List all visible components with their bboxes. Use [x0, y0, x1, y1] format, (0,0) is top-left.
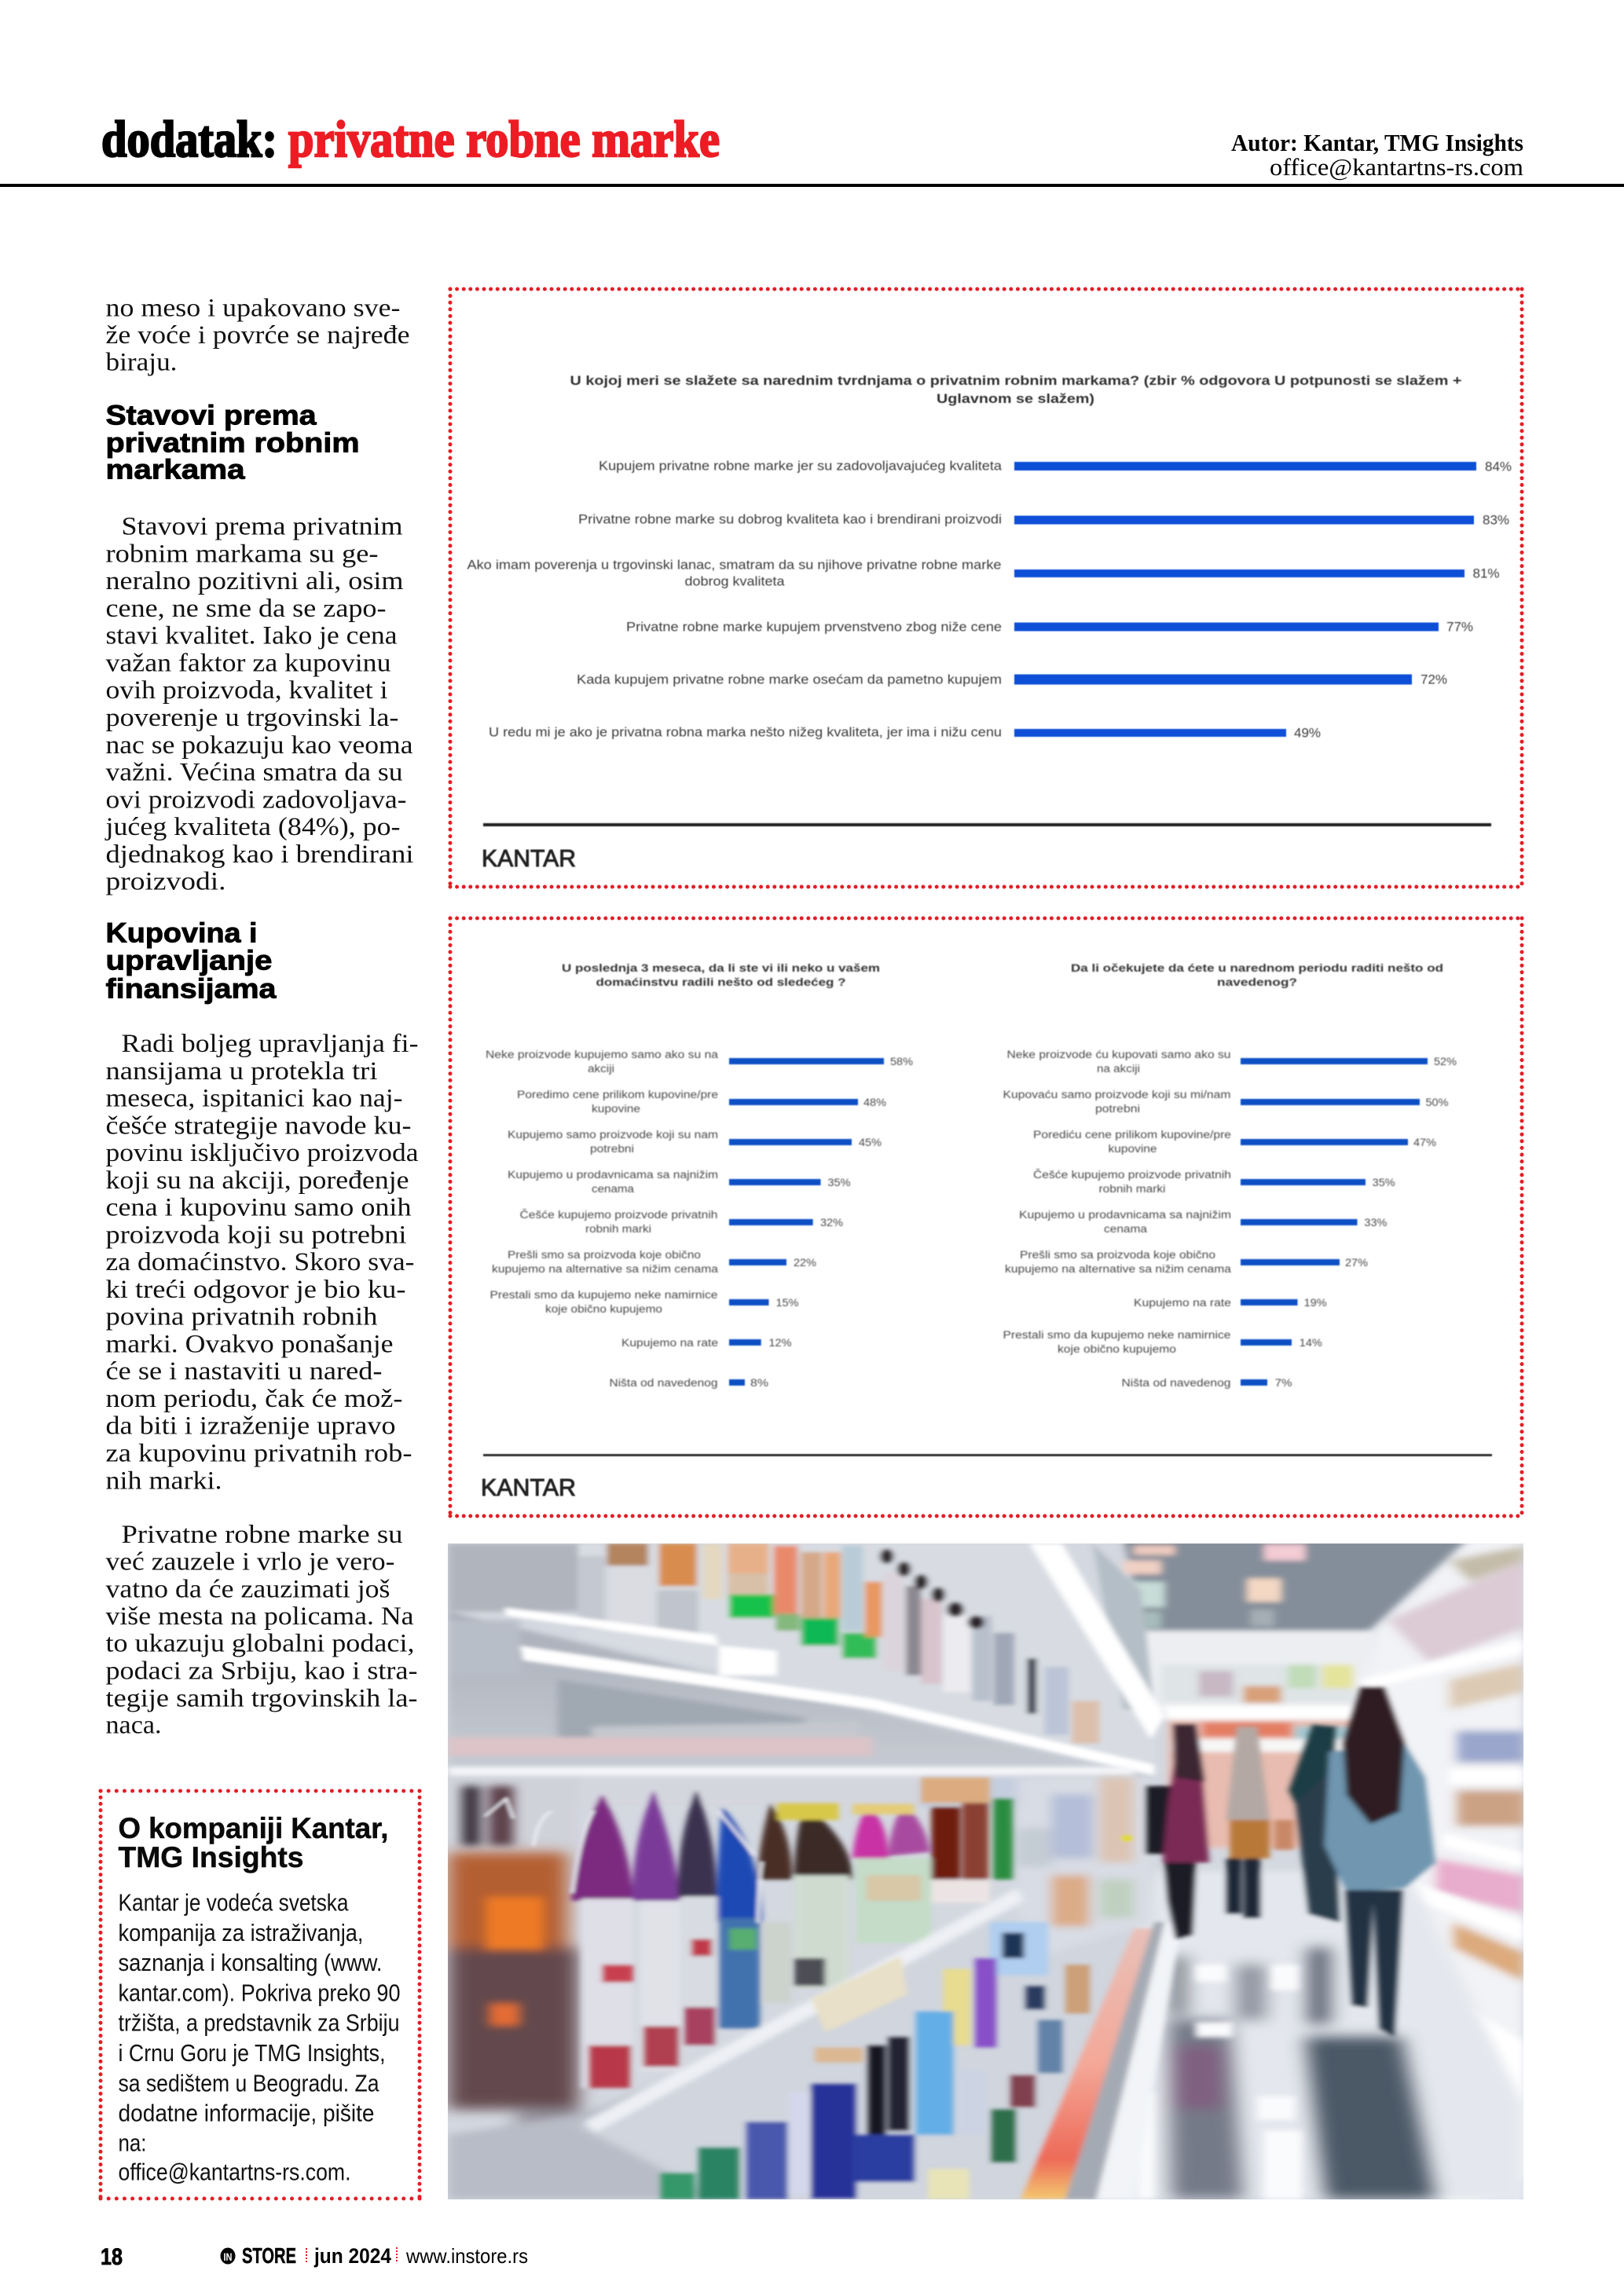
- values: 49%: [1294, 726, 1321, 740]
- chart: agreement statements: [467, 373, 1512, 872]
- paragraph: finance management: povina privatnih robnih: [105, 1303, 378, 1331]
- labels: Kupujemo u prodavnicama sa najnižim: [508, 1169, 718, 1181]
- labels: potrebni: [590, 1143, 634, 1155]
- sidebar body: Kantar je vodeća svetska: [118, 1888, 349, 1917]
- labels: Ništa od navedenog: [610, 1377, 718, 1389]
- chart title: [1071, 961, 1443, 988]
- author credit: [1231, 129, 1523, 181]
- labels: koje obično kupujemo: [545, 1303, 662, 1315]
- labels: potrebni: [1095, 1103, 1140, 1115]
- panel: behaviour charts: [450, 918, 1522, 1516]
- paragraph: continuation: biraju.: [105, 349, 178, 377]
- paragraph: finance management: nih marki.: [105, 1467, 222, 1496]
- heading: Stavovi prema privatnim robnim markama: [105, 401, 360, 485]
- author credit: Autor: Kantar, TMG Insights: [1231, 129, 1523, 156]
- yellow price spot: [1120, 1834, 1133, 1842]
- page number: 18: [101, 2244, 123, 2270]
- sidebar border: dotted: [101, 1791, 420, 2199]
- paragraph: attitudes: neralno pozitivni ali, osim: [105, 567, 404, 595]
- Kantar logo: KANTAR: [481, 1474, 576, 1501]
- labels: akciji: [588, 1063, 614, 1075]
- paragraph: attitudes: nac se pokazuju kao veoma: [105, 731, 413, 760]
- paragraph: continuation: no meso i upakovano sve-: [105, 294, 401, 322]
- statement labels: [467, 459, 1003, 740]
- labels: Prešli smo sa proizvoda koje obično: [508, 1249, 701, 1261]
- heading: Stavovi prema privatnim robnim markama: Stavovi prema: [105, 401, 317, 430]
- heading: Kupovina i upravljanje finansijama: [105, 917, 277, 1004]
- sidebar body: sa sedištem u Beogradu. Za: [118, 2069, 379, 2096]
- lit floor strip: [1021, 1922, 1182, 2199]
- labels: Kupovaću samo proizvode koji su mi/nam: [1003, 1089, 1230, 1100]
- values: 83%: [1483, 512, 1509, 528]
- labels: koje obično kupujemo: [1058, 1343, 1176, 1355]
- sidebar: about Kantar: [101, 1791, 420, 2199]
- labels: Prešli smo sa proizvoda koje obično: [1020, 1249, 1215, 1261]
- floor reflections: [1124, 1965, 1302, 2199]
- chart title: navedenog?: [1217, 976, 1297, 988]
- paragraph: conclusion: Privatne robne marke su: [121, 1521, 402, 1549]
- paragraph: finance management: za domaćinstvo. Skoro sva-: [105, 1248, 415, 1276]
- lower shelf products: [661, 1922, 1090, 2199]
- labels: [1003, 1049, 1232, 1389]
- bottles row: [448, 1852, 585, 2148]
- values: 72%: [1421, 672, 1447, 687]
- labels: Porediću cene prilikom kupovine/pre: [1033, 1129, 1231, 1141]
- paragraph: finance management: koji su na akciji, poređenje: [105, 1166, 409, 1195]
- shoppers: [1146, 1687, 1435, 2037]
- labels: Prestali smo da kupujemo neke namirnice: [490, 1289, 718, 1301]
- chart title: Da li očekujete da ćete u narednom periodu raditi nešto od: [1071, 961, 1443, 974]
- author credit: office@kantartns-rs.com: [1270, 153, 1523, 181]
- chart footer rule: [483, 1454, 1492, 1456]
- values: 52%: [1434, 1056, 1457, 1067]
- footer separators: [306, 2247, 397, 2263]
- paragraph: conclusion: vatno da će zauzimati još: [105, 1575, 390, 1603]
- paragraph: attitudes: proizvodi.: [105, 867, 226, 895]
- labels: robnih marki: [1098, 1183, 1166, 1195]
- sidebar body: tržišta, a predstavnik za Srbiju: [118, 2009, 399, 2036]
- right shelves: [1360, 1540, 1525, 2199]
- header rule: [0, 184, 1624, 187]
- Kantar logo: KANTAR: [482, 844, 576, 872]
- section title: privatne robne marke: [288, 111, 720, 168]
- sidebar body: kompanija za istraživanja,: [118, 1919, 363, 1946]
- values: 33%: [1364, 1217, 1387, 1229]
- paragraph: finance management: da biti i izraženije upravo: [105, 1412, 396, 1441]
- statement labels: dobrog kvaliteta: [685, 573, 785, 589]
- paragraph: continuation: že voće i povrće se najređe: [105, 321, 410, 350]
- paragraph: finance management: povinu isključivo proizvoda: [105, 1139, 419, 1167]
- values: 48%: [863, 1097, 886, 1108]
- labels: Kupujemo na rate: [621, 1337, 718, 1349]
- labels: Neke proizvode ću kupovati samo ako su: [1007, 1049, 1230, 1060]
- statement labels: Privatne robne marke su dobrog kvaliteta kao i brendirani proizvodi: [578, 512, 1002, 526]
- paragraph: finance management: proizvoda koji su potrebni: [105, 1221, 407, 1249]
- statement labels: U redu mi je ako je privatna robna marka nešto nižeg kvaliteta, jer ima i nižu cenu: [489, 724, 1002, 740]
- values: 15%: [776, 1297, 798, 1309]
- woman in teal: [1289, 1724, 1340, 1922]
- woman in maroon: [1146, 1724, 1209, 1939]
- labels: kupujemo na alternative sa nižim cenama: [1005, 1263, 1232, 1275]
- labels: robnih marki: [585, 1223, 651, 1235]
- heading: Stavovi prema privatnim robnim markama: privatnim robnim: [105, 427, 360, 459]
- values: 19%: [1304, 1297, 1327, 1309]
- upper shelf products: [578, 1543, 1154, 1765]
- sidebar body: kantar.com). Pokriva preko 90: [118, 1979, 401, 2006]
- statement labels: Ako imam poverenja u trgovinski lanac, smatram da su njihove privatne robne marke: [467, 558, 1001, 572]
- chart title: [570, 373, 1462, 406]
- store background: ceiling and far wall: [1124, 1540, 1470, 1847]
- values: 7%: [1275, 1377, 1292, 1389]
- panel border: dotted: [450, 918, 1522, 1516]
- labels: cenama: [1104, 1223, 1148, 1235]
- chart: next period expectations: [1003, 961, 1457, 1389]
- values: [1275, 1056, 1457, 1389]
- chart title: domaćinstvu radili nešto od sledećeg ?: [596, 976, 845, 988]
- statement labels: Privatne robne marke kupujem prvenstveno zbog niže cene: [626, 619, 1002, 635]
- values: 84%: [1485, 459, 1512, 474]
- labels: kupujemo na alternative sa nižim cenama: [492, 1263, 719, 1275]
- bars: [1241, 1058, 1428, 1386]
- woman with long hair: [1325, 1687, 1435, 2037]
- heading: Kupovina i upravljanje finansijama: upravljanje: [105, 946, 272, 976]
- bottles: [571, 1778, 1014, 2088]
- labels: Kupujemo u prodavnicama sa najnižim: [1019, 1209, 1231, 1221]
- heading: Kupovina i upravljanje finansijama: Kupovina i: [105, 917, 258, 949]
- values: 8%: [750, 1377, 768, 1389]
- paragraph: finance management: nansijama u protekla tri: [105, 1057, 377, 1086]
- paragraph: finance management: češće strategije navode ku-: [105, 1111, 412, 1140]
- paragraph: attitudes: robnim markama su ge-: [105, 540, 379, 569]
- photo: blurred supermarket aisle: [448, 1543, 1523, 2199]
- paragraph: conclusion: podaci za Srbiju, kao i stra-: [105, 1657, 418, 1686]
- page header: [0, 111, 1624, 187]
- labels: cenama: [592, 1183, 635, 1195]
- labels: na akciji: [1097, 1063, 1140, 1075]
- sidebar body: office@kantartns-rs.com.: [118, 2159, 350, 2185]
- woman in beige: [1226, 1727, 1294, 1918]
- paragraph: finance management: nom periodu, čak će mož-: [105, 1385, 402, 1413]
- paragraph: conclusion: već zauzele i vrlo je vero-: [105, 1548, 395, 1576]
- left wall and under-shelf: [448, 1543, 1154, 1778]
- paragraph: finance management: Radi boljeg upravljanja fi-: [121, 1030, 418, 1058]
- sidebar heading: TMG Insights: [118, 1841, 303, 1873]
- pink hook strip and white rail: [448, 1737, 1134, 1848]
- paragraph: finance management: marki. Ovakvo ponašanje: [105, 1331, 393, 1359]
- heading: Stavovi prema privatnim robnim markama: markama: [105, 454, 245, 485]
- labels: Češće kupujemo proizvode privatnih: [1033, 1169, 1231, 1181]
- values: 14%: [1300, 1337, 1322, 1349]
- values: 50%: [1425, 1097, 1449, 1108]
- panel border: dotted: [450, 289, 1522, 887]
- paragraph: finance management: će se i nastaviti u nared-: [105, 1357, 382, 1386]
- sidebar body: na:: [118, 2129, 146, 2157]
- paragraph: finance management: za kupovinu privatnih rob-: [105, 1439, 412, 1467]
- paragraph: finance management: meseca, ispitanici kao naj-: [105, 1084, 402, 1112]
- bars: [1014, 462, 1476, 737]
- labels: kupovine: [592, 1103, 640, 1115]
- values: 58%: [890, 1056, 913, 1067]
- labels: Poredimo cene prilikom kupovine/pre: [517, 1089, 718, 1100]
- labels: [486, 1049, 719, 1389]
- icon: In Store logo mark: IN: [223, 2250, 233, 2263]
- values: 81%: [1472, 566, 1499, 581]
- paragraph: attitudes: ovi proizvodi zadovoljava-: [105, 785, 407, 814]
- sidebar body: i Crnu Goru je TMG Insights,: [118, 2039, 385, 2067]
- statement labels: Kada kupujem privatne robne marke osećam da pametno kupujem: [577, 672, 1002, 687]
- chart title: [562, 961, 880, 988]
- sidebar body: dodatne informacije, pišite: [118, 2099, 374, 2127]
- chart title: U poslednja 3 meseca, da li ste vi ili neko u vašem: [562, 961, 880, 974]
- paragraph: continuation: [105, 294, 410, 377]
- labels: Kupujemo na rate: [1134, 1297, 1231, 1309]
- section title: dodatak:: [101, 111, 277, 168]
- statement labels: Kupujem privatne robne marke jer su zadovoljavajućeg kvaliteta: [599, 459, 1003, 473]
- paragraph: attitudes: poverenje u trgovinski la-: [105, 704, 399, 732]
- issue date: jun 2024: [313, 2244, 391, 2268]
- values: 45%: [859, 1137, 882, 1148]
- labels: kupovine: [1108, 1143, 1157, 1155]
- panel: agreement chart: [450, 289, 1522, 887]
- upper shelf edge: [504, 1543, 1164, 1775]
- values: 77%: [1446, 619, 1473, 635]
- labels: Kupujemo samo proizvode koji su nam: [508, 1129, 718, 1141]
- paragraph: finance management: ki treći odgovor je bio ku-: [105, 1276, 405, 1304]
- bottle highlights: [486, 1799, 762, 1922]
- paragraph: conclusion: to ukazuju globalni podaci,: [105, 1629, 415, 1657]
- paragraph: attitudes: važan faktor za kupovinu: [105, 649, 391, 677]
- paragraph: attitudes: jućeg kvaliteta (84%), po-: [104, 813, 401, 841]
- labels: Ništa od navedenog: [1122, 1377, 1230, 1389]
- paragraph: attitudes: stavi kvalitet. Iako je cena: [105, 622, 398, 650]
- paragraph: attitudes: cene, ne sme da se zapo-: [105, 595, 387, 623]
- section title: [101, 111, 720, 168]
- paragraph: finance management: cena i kupovinu samo onih: [105, 1194, 412, 1222]
- paragraph: attitudes: Stavovi prema privatnim: [121, 512, 403, 540]
- values: 32%: [820, 1217, 843, 1229]
- paragraph: finance management: [105, 1030, 419, 1496]
- sidebar body: [118, 1888, 401, 2185]
- values: 22%: [794, 1257, 816, 1269]
- bars: [729, 1058, 884, 1386]
- labels: Neke proizvode kupujemo samo ako su na: [486, 1049, 719, 1060]
- paragraph: conclusion: [105, 1521, 418, 1739]
- values: [750, 1056, 913, 1389]
- lower shelf band and product area: [448, 1778, 1154, 2199]
- paragraph: conclusion: naca.: [105, 1711, 162, 1739]
- article text column: [104, 294, 419, 1739]
- sidebar heading: O kompaniji Kantar,: [118, 1812, 388, 1844]
- floor: [1051, 1871, 1523, 2199]
- labels: Češće kupujemo proizvode privatnih: [520, 1209, 718, 1221]
- magazine name: STORE: [242, 2243, 296, 2268]
- paragraph: attitudes: [104, 512, 413, 895]
- paragraph: attitudes: ovih proizvoda, kvalitet i: [105, 676, 388, 705]
- paragraph: conclusion: više mesta na policama. Na: [105, 1602, 414, 1631]
- sidebar heading: [118, 1812, 388, 1873]
- values: 35%: [1373, 1177, 1395, 1188]
- values: 27%: [1345, 1257, 1368, 1269]
- sidebar body: saznanja i konsalting (www.: [118, 1949, 382, 1976]
- paragraph: attitudes: važni. Većina smatra da su: [105, 759, 402, 787]
- values: 35%: [828, 1177, 850, 1188]
- chart footer rule: [483, 823, 1491, 826]
- chart: last three months: [486, 961, 913, 1389]
- heading: Kupovina i upravljanje finansijama: finansijama: [105, 974, 277, 1004]
- paragraph: attitudes: djednakog kao i brendirani: [105, 840, 413, 869]
- icon: In Store logo mark: [220, 2248, 236, 2264]
- website: www.instore.rs: [405, 2244, 528, 2268]
- page footer: [101, 2243, 528, 2270]
- values: 12%: [768, 1337, 792, 1349]
- values: [1294, 459, 1512, 740]
- labels: Prestali smo da kupujemo neke namirnice: [1003, 1329, 1230, 1341]
- chart title: U kojoj meri se slažete sa narednim tvrdnjama o privatnim robnim markama? (zbir % odgovora U potpunosti se slažem +: [570, 373, 1462, 388]
- chart title: Uglavnom se slažem): [937, 391, 1094, 406]
- paragraph: conclusion: tegije samih trgovinskih la-: [105, 1684, 418, 1712]
- values: 47%: [1413, 1137, 1436, 1148]
